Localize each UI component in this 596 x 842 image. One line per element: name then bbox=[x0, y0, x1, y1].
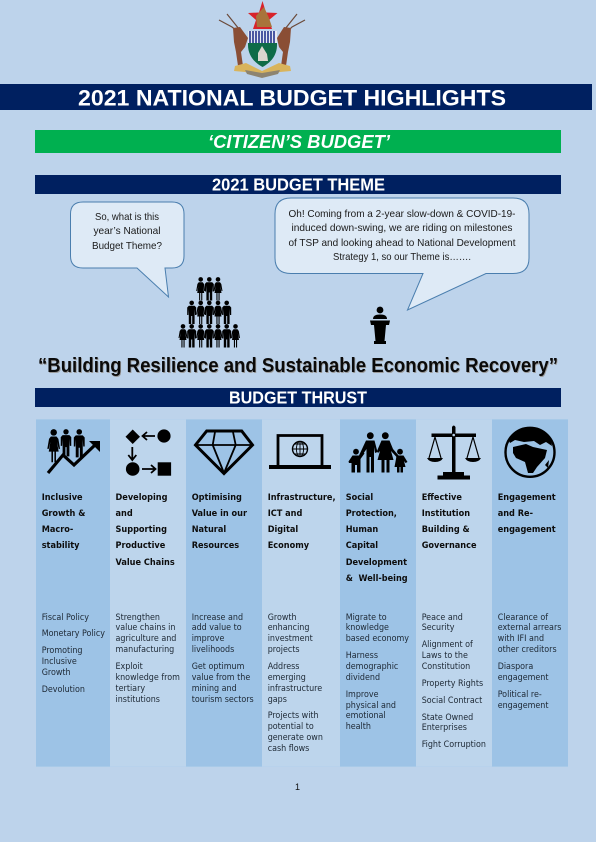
policy list: Fiscal Policy bbox=[42, 613, 89, 623]
panel: social protection bbox=[340, 420, 416, 766]
policy list: engagement bbox=[498, 701, 549, 711]
policy list: cash flows bbox=[268, 744, 309, 754]
policy list: agriculture and bbox=[116, 634, 176, 644]
policy list: Promoting bbox=[42, 646, 82, 656]
heading text: Infrastructure, bbox=[268, 493, 336, 503]
icon: process flow shapes bbox=[126, 429, 171, 476]
speech bubble: answer bbox=[275, 198, 529, 310]
policy list: enhancing bbox=[268, 623, 309, 633]
policy list: gaps bbox=[268, 695, 287, 705]
policy list: Security bbox=[422, 623, 455, 633]
speech bubble: answer: Oh! Coming from a 2-year slow-down & COVID-19- bbox=[288, 209, 516, 220]
policy list: Get optimum bbox=[192, 662, 245, 672]
heading text: Social bbox=[346, 493, 373, 503]
policy list: Increase and bbox=[192, 613, 243, 623]
policy list: Constitution bbox=[422, 662, 470, 672]
page number: 1 bbox=[295, 782, 300, 792]
policy list: Growth bbox=[42, 668, 71, 678]
coat of arms emblem bbox=[219, 1, 305, 78]
icon: crowd pyramid bbox=[178, 277, 240, 348]
heading text: Macro- bbox=[42, 525, 73, 535]
policy list: physical and bbox=[346, 701, 396, 711]
budget theme heading bbox=[35, 174, 561, 194]
policy list: knowledge bbox=[346, 623, 389, 633]
policy list: value from the bbox=[192, 673, 250, 683]
policy list: Fight Corruption bbox=[422, 740, 486, 750]
speech bubble: answer: Strategy 1, so our Theme is……. bbox=[333, 252, 471, 263]
budget theme heading: 2021 BUDGET THEME bbox=[212, 174, 385, 194]
budget thrust heading bbox=[35, 388, 561, 408]
heading text: Institution bbox=[422, 509, 470, 519]
heading text: Governance bbox=[422, 541, 477, 551]
heading text: Resources bbox=[192, 541, 239, 551]
theme statement: “Building Resilience and Sustainable Economic Recovery” bbox=[38, 354, 558, 377]
policy list: external arrears bbox=[498, 623, 561, 633]
policy list: Enterprises bbox=[422, 723, 467, 733]
policy list: Migrate to bbox=[346, 613, 387, 623]
heading text: Developing bbox=[116, 493, 168, 503]
panel: inclusive growth bbox=[36, 420, 110, 766]
policy list: based economy bbox=[346, 634, 409, 644]
heading text: & Well-being bbox=[346, 574, 408, 584]
heading text: Protection, bbox=[346, 509, 397, 519]
heading text: Optimising bbox=[192, 493, 242, 503]
policy list: institutions bbox=[116, 695, 160, 705]
icon: laptop with globe bbox=[269, 436, 331, 467]
heading text: and Re- bbox=[498, 509, 533, 519]
policy list: emerging bbox=[268, 673, 306, 683]
policy list: Exploit bbox=[116, 662, 143, 672]
heading text: Digital bbox=[268, 525, 298, 535]
policy list: Clearance of bbox=[498, 613, 548, 623]
heading text: Value Chains bbox=[116, 558, 175, 568]
policy list: improve bbox=[192, 634, 224, 644]
heading text: Building & bbox=[422, 525, 470, 535]
title banner bbox=[0, 84, 592, 110]
heading text: Effective bbox=[422, 493, 462, 503]
heading text: and bbox=[116, 509, 133, 519]
icon: people and rising arrow bbox=[47, 429, 100, 473]
policy list: engagement bbox=[498, 673, 549, 683]
heading text: ICT and bbox=[268, 509, 303, 519]
policy list: value chains in bbox=[116, 623, 175, 633]
policy list: dividend bbox=[346, 673, 380, 683]
policy list: Monetary Policy bbox=[42, 629, 105, 639]
policy list: State Owned bbox=[422, 713, 473, 723]
heading text: Human bbox=[346, 525, 378, 535]
policy list: demographic bbox=[346, 662, 398, 672]
policy list: tertiary bbox=[116, 684, 145, 694]
icon: globe bbox=[506, 428, 554, 477]
policy list: Peace and bbox=[422, 613, 463, 623]
heading text: Development bbox=[346, 558, 407, 568]
policy list: projects bbox=[268, 645, 300, 655]
policy list: add value to bbox=[192, 623, 242, 633]
policy list: potential to bbox=[268, 722, 314, 732]
policy list: Social Contract bbox=[422, 696, 482, 706]
panel: engagement bbox=[492, 420, 568, 766]
policy list: Improve bbox=[346, 690, 379, 700]
policy list: Alignment of bbox=[422, 640, 473, 650]
icon: scales of justice bbox=[427, 426, 481, 480]
policy list: Growth bbox=[268, 613, 297, 623]
speech bubble: answer: induced down-swing, we are riding on milestones bbox=[292, 223, 512, 234]
heading text: Engagement bbox=[498, 493, 556, 503]
policy list: infrastructure bbox=[268, 684, 322, 694]
policy list: Property Rights bbox=[422, 679, 483, 689]
budget thrust heading: BUDGET THRUST bbox=[229, 388, 367, 408]
policy list: Harness bbox=[346, 651, 378, 661]
theme statement: “Building Resilience and Sustainable Economic Recovery” bbox=[39, 355, 559, 378]
speech bubble: question: year’s National bbox=[94, 226, 160, 237]
heading text: Inclusive bbox=[42, 493, 83, 503]
heading text: engagement bbox=[498, 525, 556, 535]
speech bubble: answer: of TSP and looking ahead to National Development bbox=[288, 238, 516, 249]
panel: budget thrust table bbox=[36, 419, 568, 767]
policy list: Address bbox=[268, 662, 299, 672]
citizen's budget banner: ‘CITIZEN’S BUDGET’ bbox=[208, 131, 391, 152]
heading text: Productive bbox=[116, 541, 166, 551]
policy list: mining and bbox=[192, 684, 237, 694]
speech bubble: question bbox=[70, 202, 184, 297]
citizen's budget banner bbox=[35, 130, 561, 153]
policy list: tourism sectors bbox=[192, 695, 254, 705]
policy list: Projects with bbox=[268, 711, 319, 721]
policy list: manufacturing bbox=[116, 645, 174, 655]
heading text: Capital bbox=[346, 541, 378, 551]
policy list: Strengthen bbox=[116, 613, 160, 623]
heading text: Supporting bbox=[116, 525, 167, 535]
policy list: Laws to the bbox=[422, 651, 468, 661]
panel: institution building bbox=[416, 420, 492, 766]
heading text: Growth & bbox=[42, 509, 85, 519]
panel: infrastructure and ICT bbox=[262, 420, 340, 766]
policy list: Diaspora bbox=[498, 662, 533, 672]
title banner: 2021 NATIONAL BUDGET HIGHLIGHTS bbox=[78, 86, 506, 110]
policy list: Political re- bbox=[498, 690, 542, 700]
speech bubble: question: Budget Theme? bbox=[92, 241, 162, 252]
icon: family bbox=[348, 432, 408, 472]
heading text: Value in our bbox=[192, 509, 248, 519]
icon: speaker at podium bbox=[370, 307, 390, 344]
heading text: stability bbox=[42, 541, 80, 551]
speech bubble: question: So, what is this bbox=[95, 212, 159, 223]
panel: natural resources bbox=[186, 420, 262, 766]
policy list: emotional bbox=[346, 711, 386, 721]
policy list: with IFI and bbox=[498, 634, 544, 644]
policy list: health bbox=[346, 722, 371, 732]
icon: diamond bbox=[196, 431, 252, 474]
policy list: Inclusive bbox=[42, 657, 77, 667]
policy list: livelihoods bbox=[192, 645, 234, 655]
policy list: generate own bbox=[268, 733, 323, 743]
policy list: investment bbox=[268, 634, 313, 644]
heading text: Natural bbox=[192, 525, 226, 535]
heading text: Economy bbox=[268, 541, 310, 551]
panel: productive value chains bbox=[110, 420, 186, 766]
policy list: Devolution bbox=[42, 685, 85, 695]
policy list: knowledge from bbox=[116, 673, 180, 683]
policy list: other creditors bbox=[498, 645, 557, 655]
